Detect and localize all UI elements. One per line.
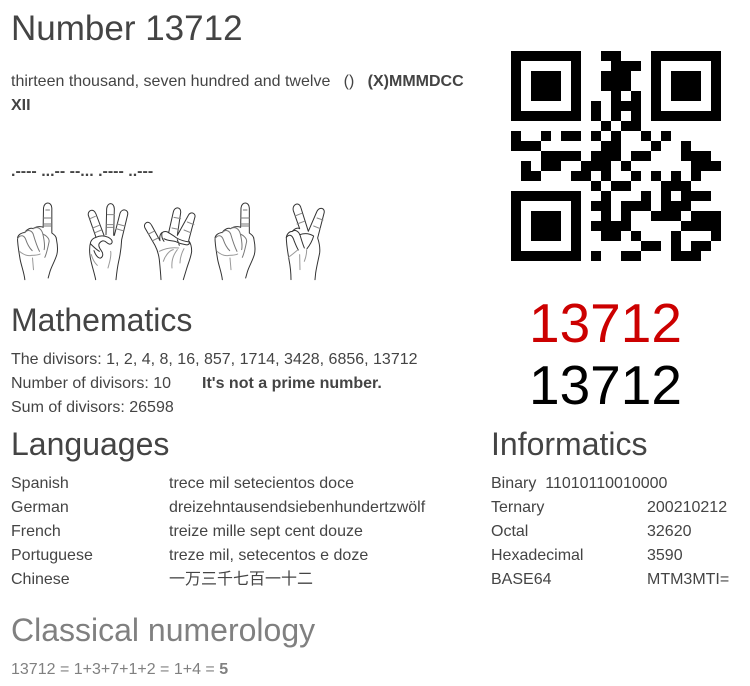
title: Number 13712 bbox=[11, 9, 243, 48]
French row bbox=[11, 523, 363, 540]
divisors list: The divisors: 1, 2, 4, 8, 16, 857, 1714, 3428, 6856, 13712 bbox=[11, 351, 418, 368]
French row: French bbox=[11, 523, 61, 540]
ternary row: 200210212 bbox=[647, 499, 727, 516]
icon: sign language hands bbox=[17, 202, 325, 280]
sum of divisors: Sum of divisors: 26598 bbox=[11, 399, 174, 416]
icon: hand sign 2 bbox=[286, 204, 324, 280]
octal row bbox=[491, 523, 692, 540]
base64 row: BASE64 bbox=[491, 571, 551, 588]
heading: Informatics: Informatics bbox=[491, 426, 647, 462]
base64 row: MTM3MTI= bbox=[647, 571, 729, 588]
large number in black: 13712 bbox=[529, 354, 682, 416]
number in words and roman numeral bbox=[11, 73, 464, 114]
German row bbox=[11, 499, 426, 516]
heading: Languages: Languages bbox=[11, 426, 169, 462]
QR data modules bbox=[511, 51, 721, 261]
hexadecimal row: Hexadecimal bbox=[491, 547, 583, 564]
icon: hand sign 1 bbox=[215, 203, 255, 280]
ternary row bbox=[491, 499, 727, 516]
octal row: 32620 bbox=[647, 523, 692, 540]
QR finder patterns bbox=[511, 51, 721, 261]
octal row: Octal bbox=[491, 523, 528, 540]
large number in red: 13712 bbox=[529, 292, 682, 354]
icon: hand sign 3 bbox=[88, 204, 128, 280]
Chinese row: Chinese bbox=[11, 571, 70, 588]
Chinese row: 一万三千七百一十二 bbox=[169, 571, 313, 588]
languages table bbox=[11, 475, 426, 588]
informatics table bbox=[491, 475, 729, 588]
French row: treize mille sept cent douze bbox=[169, 523, 363, 540]
Chinese row bbox=[11, 570, 313, 588]
mathematics facts bbox=[11, 351, 418, 416]
Portuguese row bbox=[11, 547, 368, 564]
number of divisors: Number of divisors: 10 bbox=[11, 375, 171, 392]
binary row: Binary 11010110010000 bbox=[491, 475, 667, 492]
Spanish row: trece mil setecientos doce bbox=[169, 475, 354, 492]
morse code: .---- ...-- --... .---- ..--- bbox=[11, 163, 153, 180]
icon: hand sign 7 bbox=[144, 208, 195, 280]
heading: Mathematics: Mathematics bbox=[11, 302, 192, 338]
German row: German bbox=[11, 499, 69, 516]
icon: hand sign 1 bbox=[17, 203, 58, 280]
numerology sum: 13712 = 1+3+7+1+2 = 1+4 = 5 bbox=[11, 661, 228, 678]
number in words and roman numeral: thirteen thousand, seven hundred and twelve () (X)MMMDCC bbox=[11, 73, 464, 90]
number in words and roman numeral: XII bbox=[11, 97, 31, 114]
hexadecimal row bbox=[491, 547, 683, 564]
Portuguese row: Portuguese bbox=[11, 547, 93, 564]
prime status: It's not a prime number. bbox=[202, 375, 382, 392]
Spanish row: Spanish bbox=[11, 475, 69, 492]
ternary row: Ternary bbox=[491, 499, 544, 516]
base64 row bbox=[491, 571, 729, 588]
Spanish row bbox=[11, 475, 354, 492]
German row: dreizehntausendsiebenhundertzwölf bbox=[169, 499, 425, 516]
Portuguese row: treze mil, setecentos e doze bbox=[169, 547, 368, 564]
hexadecimal row: 3590 bbox=[647, 547, 683, 564]
QR code bbox=[511, 51, 721, 261]
heading: Classical numerology: Classical numerology bbox=[11, 612, 315, 648]
